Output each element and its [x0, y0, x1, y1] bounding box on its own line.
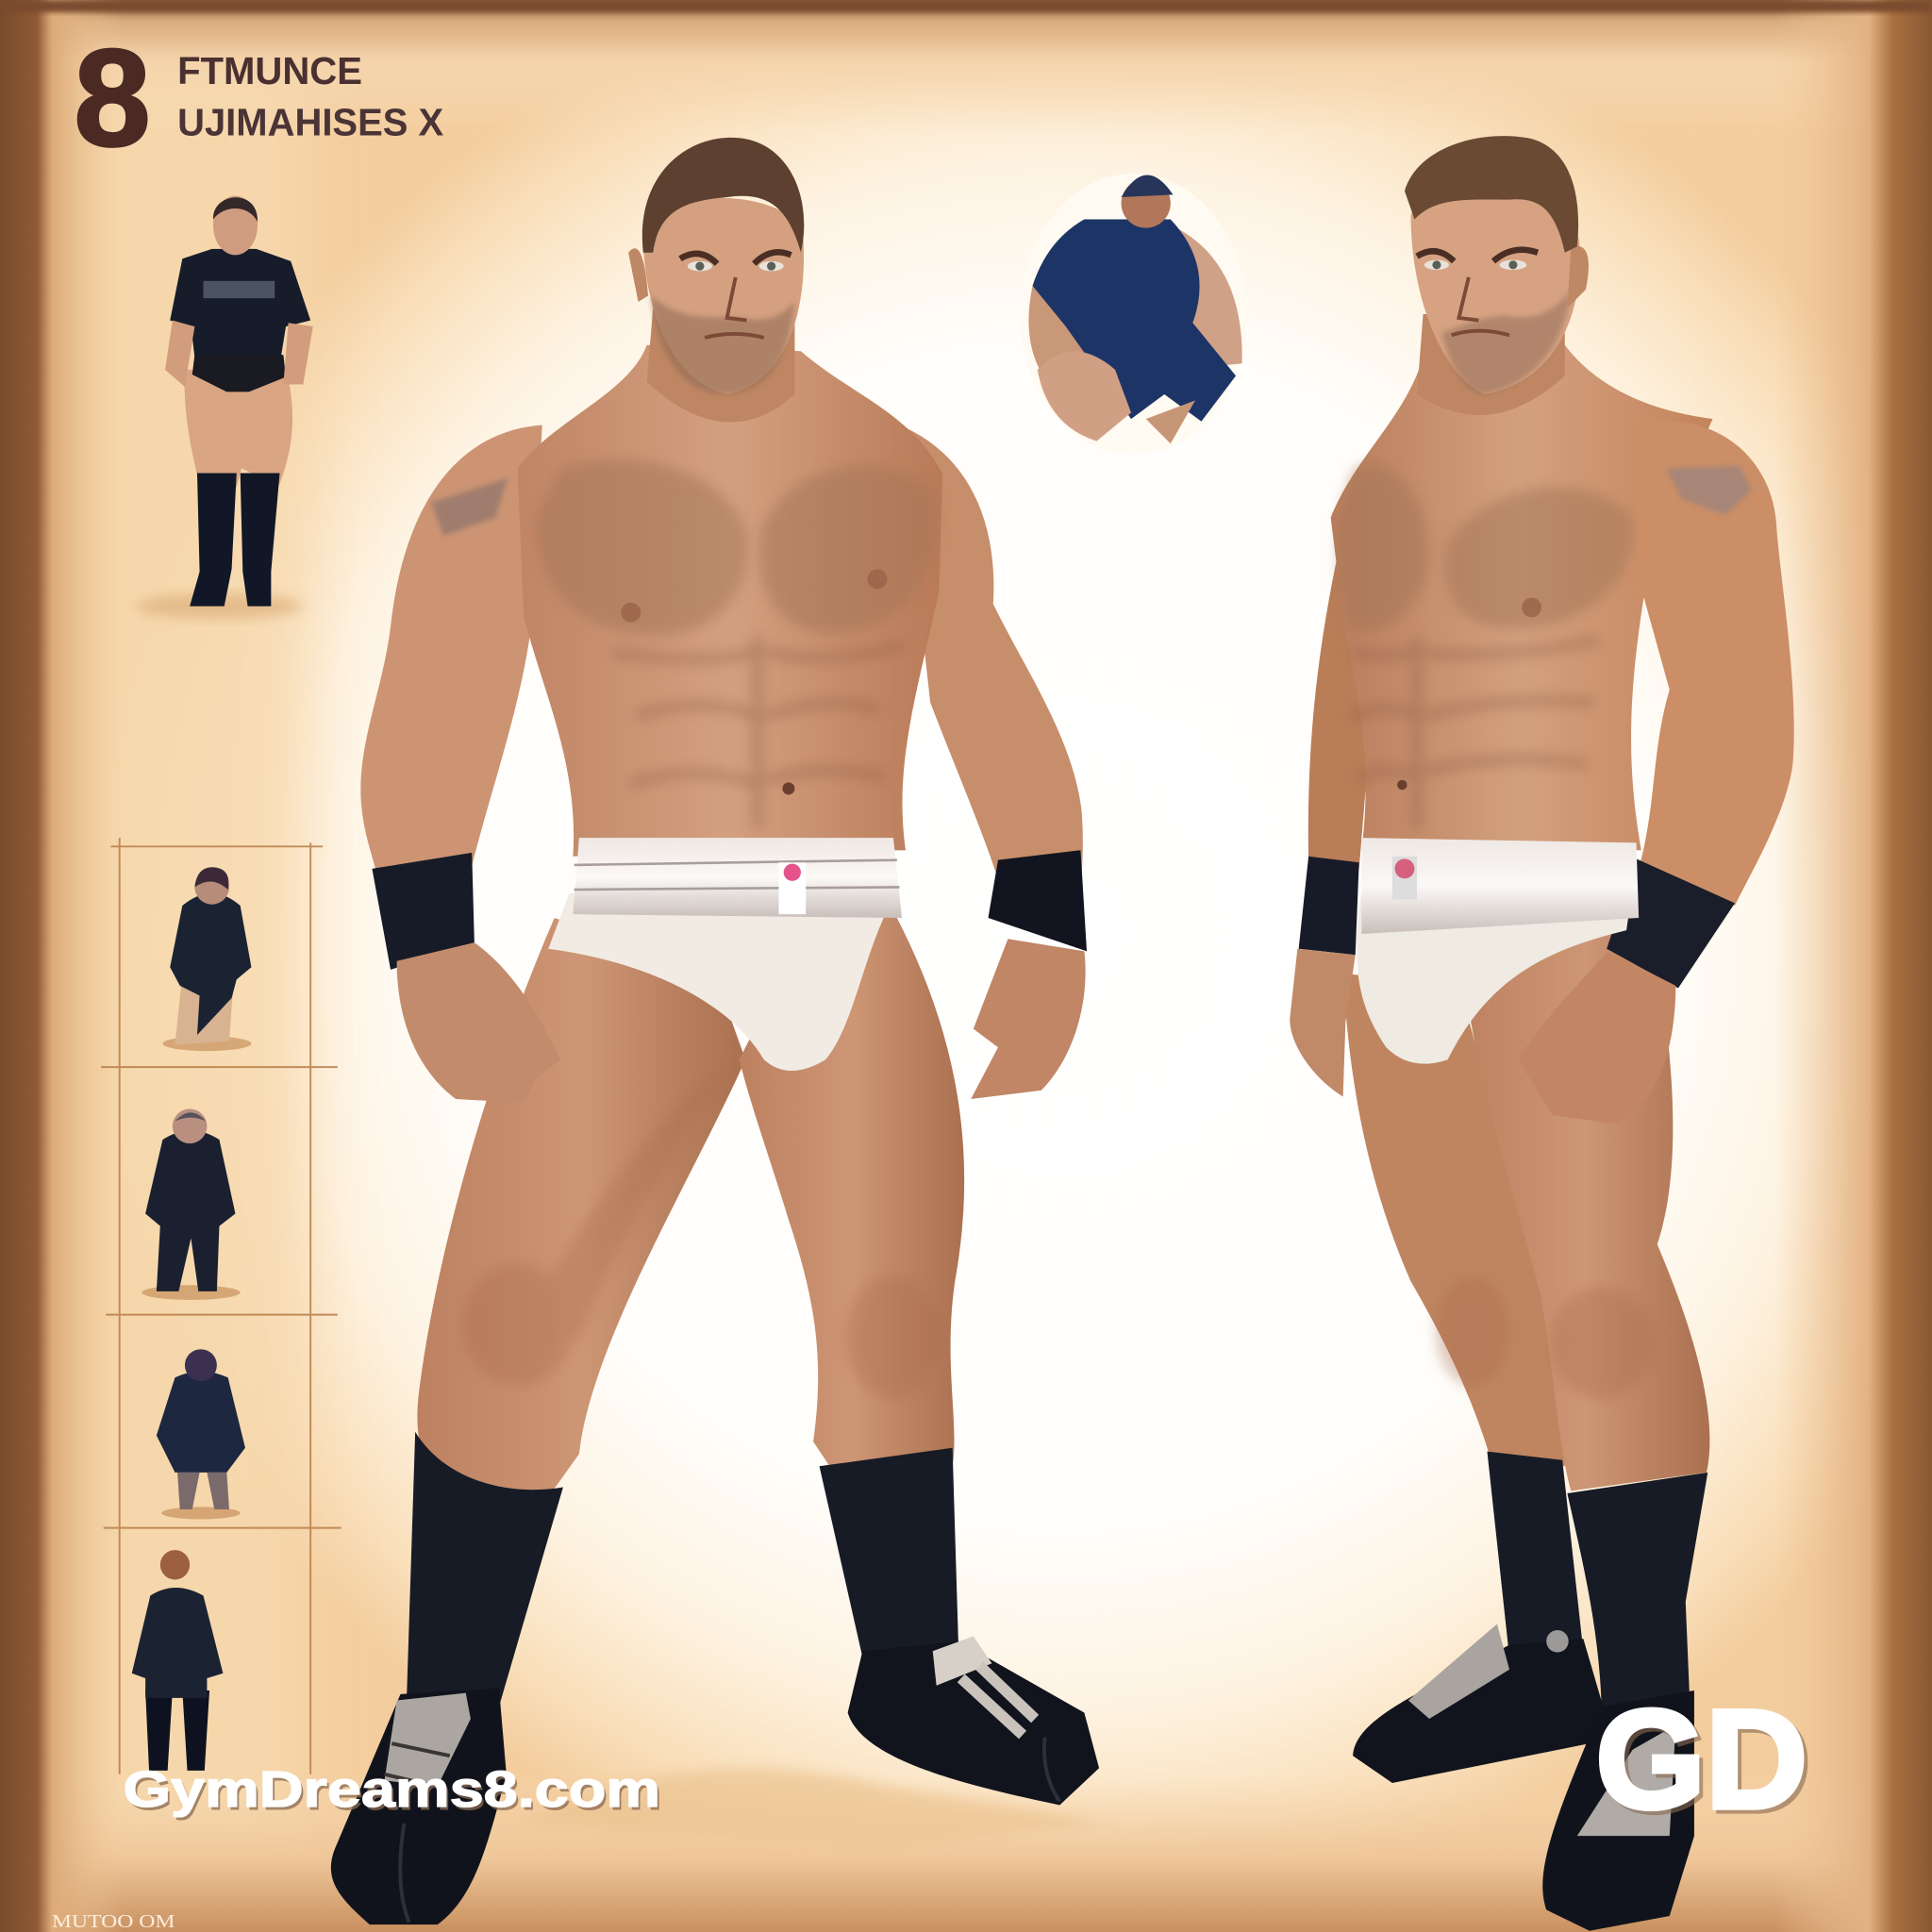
left shoe: [1353, 1624, 1607, 1783]
wrist bands: [372, 853, 475, 970]
neck: [1417, 314, 1565, 415]
title: first line: FTMUNCE: [177, 49, 362, 92]
small figure: robe three-quarter: [142, 1109, 241, 1300]
right shoe: [848, 1637, 1099, 1805]
hands: [397, 942, 560, 1103]
knee shading: [462, 1072, 941, 1398]
white athletic shorts: [548, 838, 902, 1071]
small figure: back view: [132, 1550, 223, 1771]
nose and mouth: [1452, 277, 1509, 335]
watermark: logo: GD: [1599, 1684, 1811, 1841]
right leg: [1460, 924, 1709, 1491]
hands: [1290, 949, 1356, 1096]
round inset: crouching figure: [1020, 174, 1247, 455]
socks: [1487, 1452, 1583, 1657]
chest shading: [1339, 464, 1633, 631]
abdominal shading: [1356, 641, 1595, 825]
watermark: website: GymDreams8.com: [125, 1766, 663, 1822]
tattoo: [1666, 466, 1752, 515]
reference frames: [101, 838, 341, 1774]
head: [643, 198, 804, 394]
hair: [1405, 136, 1578, 253]
left leg: [1343, 974, 1565, 1466]
neck: [647, 308, 794, 423]
small figure: robe rounded: [157, 1349, 245, 1519]
title: large numeral: 8: [74, 21, 151, 175]
white athletic shorts: [1357, 838, 1639, 1064]
abdominal shading: [616, 641, 899, 825]
small caption: MUTOO OM: [52, 1912, 175, 1932]
nose and mouth: [705, 277, 764, 338]
ground shadow: [518, 1769, 1109, 1848]
small figure: shirt and socks: [136, 196, 313, 619]
left shoe: [331, 1688, 507, 1924]
torso: [1331, 345, 1713, 850]
eyes: [680, 252, 791, 271]
title block: [74, 21, 443, 175]
main figure: three-quarter view: [1290, 136, 1794, 1931]
chest shading: [536, 459, 936, 635]
far arm: [1308, 530, 1374, 869]
near arm: [1633, 421, 1794, 906]
eyes: [1417, 250, 1538, 270]
right leg: [740, 899, 964, 1478]
left leg: [417, 918, 745, 1497]
torso: [518, 345, 942, 857]
wrist bands: [1299, 857, 1359, 955]
tattoo: [431, 478, 508, 536]
head: [1411, 192, 1580, 394]
main figure: front view: [331, 138, 1109, 1924]
small figure: robe front: [162, 867, 251, 1051]
socks: [407, 1432, 563, 1707]
watermark: logo: GD: [1595, 1680, 1807, 1838]
hair: [642, 138, 804, 253]
watermark: website: GymDreams8.com: [124, 1762, 660, 1818]
arms: [360, 425, 542, 887]
title: second line: UJIMAHISES X: [177, 101, 443, 144]
right shoe: [1542, 1690, 1694, 1931]
knee shading: [1436, 1275, 1654, 1398]
